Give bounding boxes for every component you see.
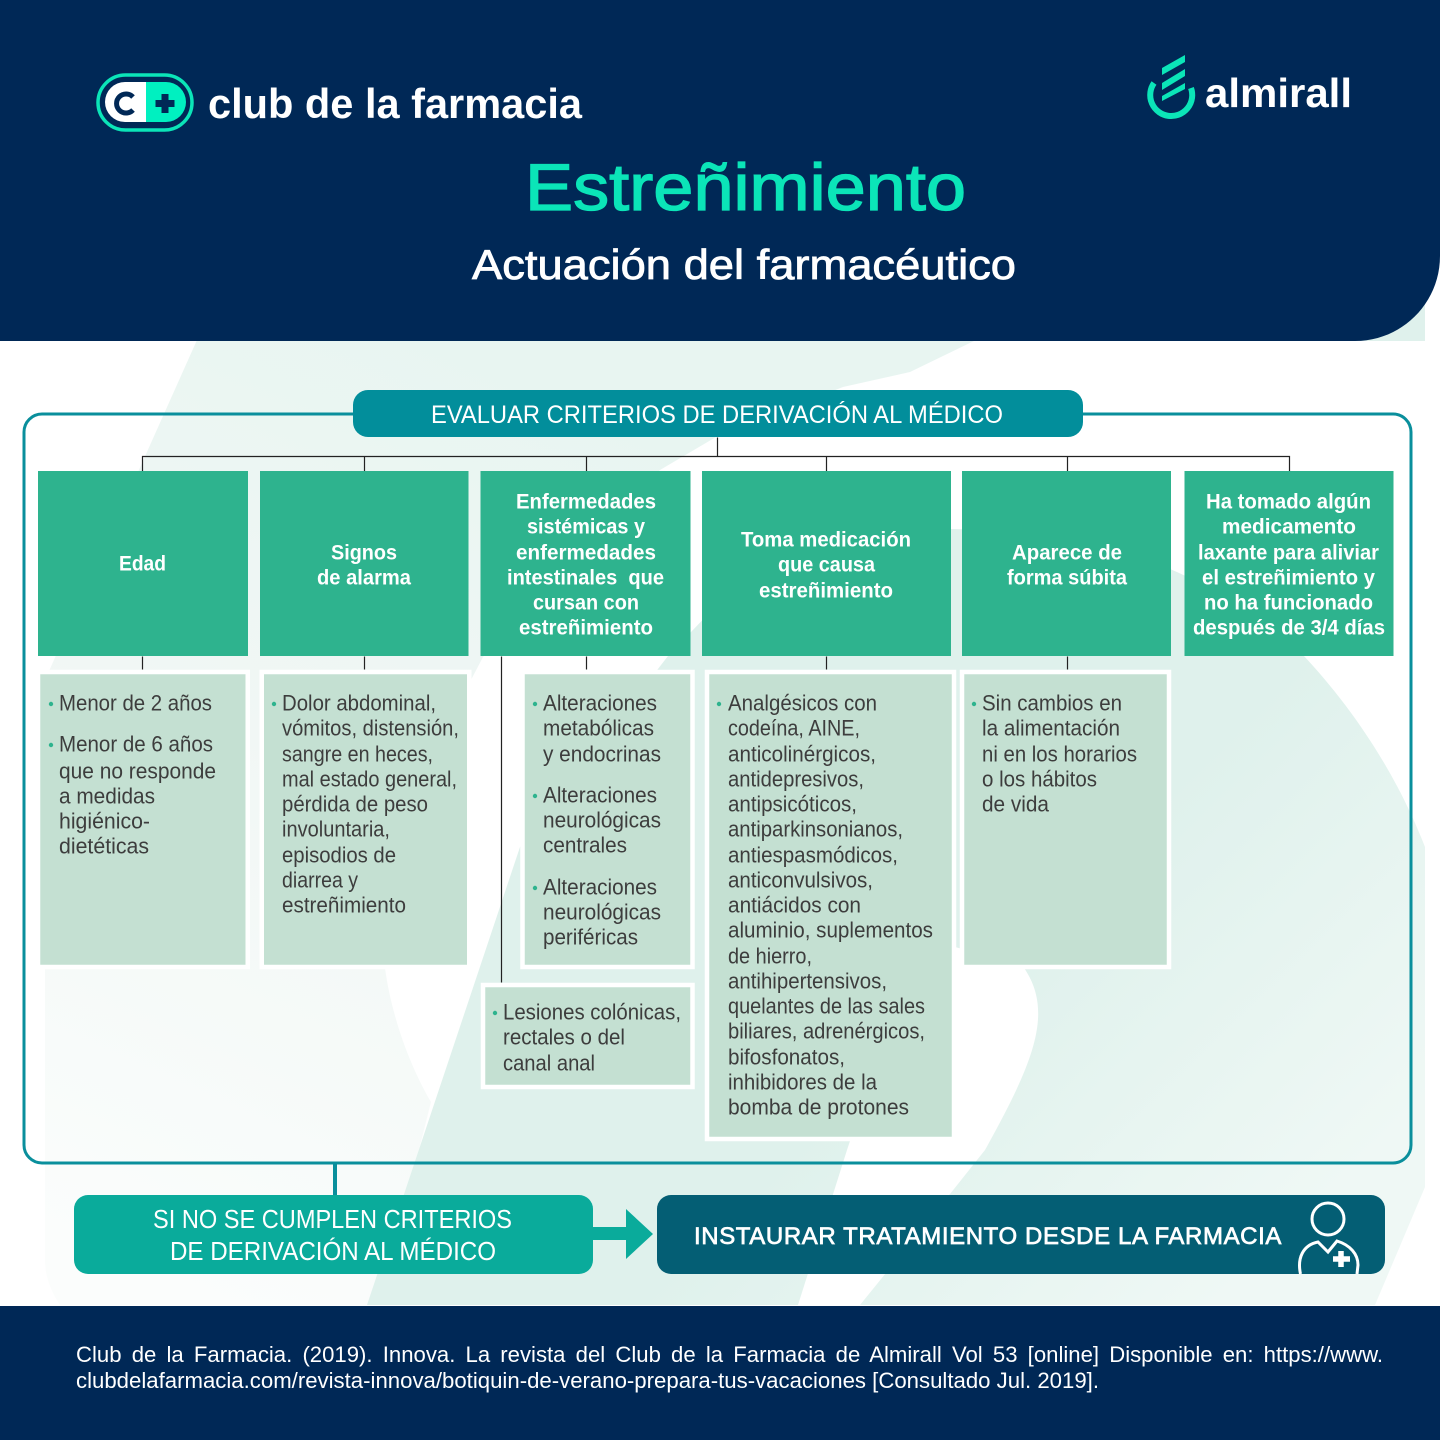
panel: signos details: sangre en heces, <box>282 741 433 766</box>
panel: medicacion details: inhibidores de la <box>728 1069 878 1094</box>
header box: toma medicacion: que causa <box>778 552 876 576</box>
callout: si no se cumplen criterios: SI NO SE CUMPLEN CRITERIOS <box>153 1206 512 1234</box>
logo: club de la farmacia <box>98 75 583 130</box>
header box: toma medicacion <box>702 471 951 656</box>
heading: evaluar criterios <box>353 390 1083 437</box>
panel: signos details: Dolor abdominal, <box>282 690 436 715</box>
panel: alteraciones details: centrales <box>543 832 627 857</box>
callout: instaurar tratamiento <box>657 1195 1385 1274</box>
subtitle: Actuación del farmacéutico <box>472 241 1016 288</box>
panel: signos details: estreñimiento <box>282 892 406 917</box>
icon: pill logo <box>98 75 192 130</box>
panel: alteraciones details <box>522 672 692 967</box>
panel: medicacion details: aluminio, suplementos <box>728 917 933 942</box>
panel: lesiones details: canal anal <box>503 1050 595 1075</box>
header box: laxante: Ha tomado algún <box>1206 489 1371 513</box>
panel: medicacion details: antiespasmódicos, <box>728 842 898 867</box>
panel: edad details: a medidas <box>59 783 155 808</box>
callout: instaurar tratamiento: INSTAURAR TRATAMIENTO DESDE LA FARMACIA <box>694 1223 1282 1250</box>
header box: laxante <box>1184 471 1394 656</box>
icon: almirall mark <box>1150 55 1192 116</box>
panel: lesiones details: rectales o del <box>503 1024 625 1049</box>
panel: lesiones details: Lesiones colónicas, <box>503 999 681 1024</box>
panel: alteraciones details: Alteraciones <box>543 782 657 807</box>
panel: alteraciones details: Alteraciones <box>543 874 657 899</box>
header box: signos de alarma: Signos <box>331 540 397 564</box>
connector: frame to criteria box <box>333 1163 337 1196</box>
panel: edad details <box>38 672 248 967</box>
panel: signos details: involuntaria, <box>282 816 390 841</box>
footer citation: Club de la Farmacia. (2019). Innova. La revista del Club de la Farmacia de Almirall Vol 53 [online] Disponible en: https://www. <box>76 1342 1383 1367</box>
panel: signos details: diarrea y <box>282 867 358 892</box>
footer citation <box>76 1342 1383 1393</box>
panel: forma subita details: o los hábitos <box>982 766 1097 791</box>
header box: enfermedades: intestinales que <box>507 565 664 589</box>
header box: enfermedades: cursan con <box>533 590 639 614</box>
header box: laxante: laxante para aliviar <box>1198 540 1380 564</box>
arrow <box>593 1209 653 1259</box>
panel: medicacion details: antiparkinsonianos, <box>728 816 903 841</box>
panel: medicacion details: antidepresivos, <box>728 766 864 791</box>
header band <box>0 0 1440 341</box>
footer citation: clubdelafarmacia.com/revista-innova/botiquin-de-verano-prepara-tus-vacaciones [Consultado Jul. 2019]. <box>76 1368 1099 1393</box>
header box: aparece de forma subita <box>962 471 1171 656</box>
header box: laxante: medicamento <box>1222 514 1356 538</box>
connector tree <box>142 438 1290 982</box>
panel: forma subita details <box>962 672 1169 967</box>
panel: alteraciones details: neurológicas <box>543 807 661 832</box>
header box: toma medicacion: estreñimiento <box>759 578 893 602</box>
panel: forma subita details: de vida <box>982 791 1050 816</box>
panel: medicacion details: anticonvulsivos, <box>728 867 873 892</box>
panel: medicacion details: anticolinérgicos, <box>728 741 876 766</box>
panel: signos details: mal estado general, <box>282 766 457 791</box>
heading: evaluar criterios: EVALUAR CRITERIOS DE DERIVACIÓN AL MÉDICO <box>431 400 1003 429</box>
panel: signos details: episodios de <box>282 842 396 867</box>
panel: medicacion details: bomba de protones <box>728 1094 909 1119</box>
panel: evaluation frame <box>24 414 1411 1163</box>
panel: edad details: que no responde <box>59 758 216 783</box>
header box: enfermedades: sistémicas y <box>527 514 645 538</box>
panel: medicacion details: quelantes de las sales <box>728 993 925 1018</box>
panel: alteraciones details: periféricas <box>543 924 638 949</box>
panel: medicacion details: codeína, AINE, <box>728 715 860 740</box>
panel: alteraciones details: metabólicas <box>543 715 654 740</box>
header box: aparece de forma subita: forma súbita <box>1007 565 1128 589</box>
header box: edad <box>38 471 248 656</box>
panel: edad details: dietéticas <box>59 833 149 858</box>
panel: medicacion details: de hierro, <box>728 943 812 968</box>
panel: medicacion details: antiácidos con <box>728 892 861 917</box>
header box: aparece de forma subita: Aparece de <box>1012 540 1122 564</box>
panel: medicacion details: antihipertensivos, <box>728 968 887 993</box>
callout: si no se cumplen criterios <box>74 1195 593 1274</box>
panel: lesiones details <box>483 985 692 1087</box>
header box: enfermedades: enfermedades <box>516 540 656 564</box>
header box: laxante: después de 3/4 días <box>1193 615 1385 639</box>
background shapes <box>0 300 1440 1310</box>
header box: laxante: no ha funcionado <box>1204 590 1373 614</box>
panel: signos details: pérdida de peso <box>282 791 428 816</box>
logo: club de la farmacia: club de la farmacia <box>208 80 583 127</box>
header box: signos de alarma <box>260 471 468 656</box>
callout: si no se cumplen criterios: DE DERIVACIÓN AL MÉDICO <box>170 1237 496 1266</box>
panel: medicacion details: bifosfonatos, <box>728 1044 845 1069</box>
panel: alteraciones details: Alteraciones <box>543 690 657 715</box>
header box: edad: Edad <box>119 551 166 575</box>
panel: forma subita details: ni en los horarios <box>982 741 1137 766</box>
logo: almirall <box>1150 55 1352 116</box>
header box: enfermedades: estreñimiento <box>519 615 653 639</box>
panel: alteraciones details: y endocrinas <box>543 741 661 766</box>
panel: medicacion details: antipsicóticos, <box>728 791 857 816</box>
logo: almirall: almirall <box>1205 70 1352 116</box>
panel: edad details: Menor de 2 años <box>59 690 212 715</box>
panel: medicacion details <box>707 672 954 1139</box>
panel: medicacion details: biliares, adrenérgicos, <box>728 1018 925 1043</box>
header box: enfermedades: Enfermedades <box>516 489 656 513</box>
panel: forma subita details: la alimentación <box>982 715 1120 740</box>
title: Estreñimiento <box>525 150 966 224</box>
panel: edad details: Menor de 6 años <box>59 731 213 756</box>
header box: signos de alarma: de alarma <box>317 565 412 589</box>
icon: pharmacist <box>1300 1203 1358 1274</box>
panel: edad details: higiénico- <box>59 808 150 833</box>
panel: medicacion details: Analgésicos con <box>728 690 877 715</box>
panel: alteraciones details: neurológicas <box>543 899 661 924</box>
footer band <box>0 1306 1440 1440</box>
header box: enfermedades <box>480 471 690 656</box>
header box: toma medicacion: Toma medicación <box>741 527 911 551</box>
panel: signos details: vómitos, distensión, <box>282 715 459 740</box>
panel: signos details <box>262 672 469 967</box>
panel: forma subita details: Sin cambios en <box>982 690 1122 715</box>
header box: laxante: el estreñimiento y <box>1202 565 1375 589</box>
